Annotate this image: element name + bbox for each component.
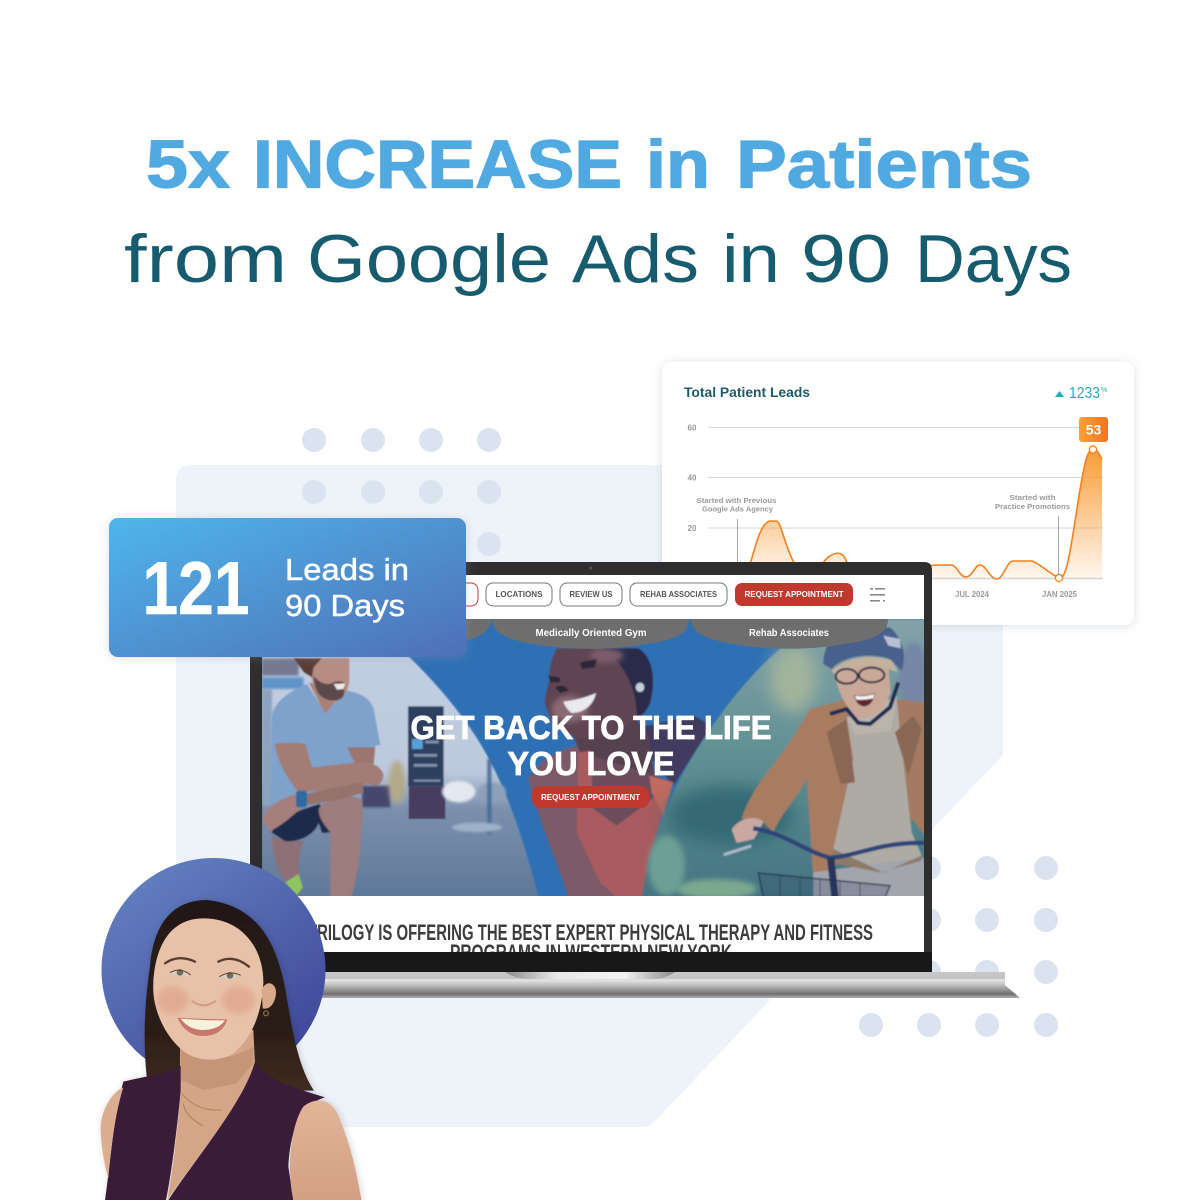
chart gridlines and axis labels bbox=[688, 424, 1103, 599]
website section heading bbox=[316, 924, 872, 952]
value badge: 53 bbox=[1079, 417, 1108, 442]
tab: rehab associates: Rehab Associates bbox=[749, 628, 829, 639]
chart gridlines and axis labels: 40 bbox=[688, 474, 697, 482]
hero headline: GET BACK TO THE LIFE bbox=[410, 709, 772, 746]
callout number: 121 bbox=[142, 546, 250, 630]
subtitle: from Google Ads in 90 Days bbox=[124, 221, 1072, 297]
nose shadow bbox=[192, 1001, 216, 1005]
growth figure: 1233% bbox=[1055, 385, 1107, 402]
top: right panel bbox=[168, 1062, 325, 1200]
nav button: partially hidden pill bbox=[466, 582, 478, 606]
nav button: request appointment: REQUEST APPOINTMENT bbox=[744, 589, 844, 599]
chart gridlines and axis labels: JUL 2024 bbox=[955, 590, 990, 599]
laptop base bbox=[300, 972, 1020, 998]
nav button: locations: LOCATIONS bbox=[496, 589, 543, 599]
title: 5x increase in patients: in bbox=[646, 126, 710, 202]
callout label: Leads in bbox=[285, 552, 409, 587]
title: 5x increase in patients: Patients bbox=[736, 126, 1032, 202]
nav button: locations bbox=[486, 583, 552, 606]
nav button: rehab associates bbox=[630, 583, 727, 606]
nav button: review us bbox=[560, 583, 622, 606]
icon: hamburger menu bbox=[870, 588, 885, 602]
chart gridlines and axis labels: JAN 2025 bbox=[1042, 590, 1078, 599]
arm: right bbox=[290, 1101, 362, 1200]
subtitle: from Google Ads in 90 Days: Days bbox=[915, 221, 1072, 297]
value badge: 53: 53 bbox=[1086, 422, 1101, 438]
annotation: started with previous agency: Google Ads Agency bbox=[702, 504, 774, 514]
laptop hinge notch bbox=[505, 972, 675, 979]
title: 5x increase in patients bbox=[146, 126, 1032, 202]
tab: rehab associates bbox=[691, 619, 888, 649]
arm: left bbox=[101, 1087, 123, 1178]
panel: total patient leads chart card bbox=[662, 362, 1134, 625]
screen: website bbox=[262, 575, 930, 965]
hero photo: smiling woman bbox=[528, 648, 712, 897]
eyes bbox=[170, 969, 241, 979]
hero button: request appointment bbox=[532, 786, 649, 808]
title: 5x increase in patients: INCREASE bbox=[253, 126, 622, 202]
portrait: smiling woman bbox=[101, 900, 362, 1200]
callout label: 90 Days bbox=[285, 588, 405, 623]
nav button: rehab associates: REHAB ASSOCIATES bbox=[640, 589, 717, 599]
top: left panel bbox=[105, 1066, 181, 1200]
face bbox=[153, 918, 263, 1060]
neck and chest bbox=[167, 1030, 255, 1200]
lower bezel bbox=[250, 952, 932, 972]
hero headline: YOU LOVE bbox=[508, 745, 674, 782]
laptop camera bbox=[590, 566, 592, 570]
subtitle: from Google Ads in 90 Days: 90 bbox=[801, 221, 891, 297]
neck shadow bbox=[181, 1047, 253, 1090]
hero image bbox=[262, 619, 930, 899]
tab: medically oriented gym bbox=[492, 619, 689, 649]
subtitle: from Google Ads in 90 Days: Google bbox=[307, 221, 551, 297]
dot grid: bottom right bbox=[859, 856, 1058, 1037]
chart heading: Total Patient Leads bbox=[684, 385, 810, 400]
annotation: started with practice promotions: Practice Promotions bbox=[995, 502, 1070, 511]
eyebrows bbox=[165, 958, 249, 967]
website section heading: TRILOGY IS OFFERING THE BEST EXPERT PHYSICAL THERAPY AND FITNESS bbox=[308, 920, 873, 945]
ear and earring bbox=[262, 983, 276, 1016]
nav button: request appointment bbox=[735, 583, 853, 606]
annotation: started with practice promotions: Started with bbox=[1010, 493, 1056, 502]
hair bbox=[145, 900, 314, 1091]
hero button: request appointment: REQUEST APPOINTMENT bbox=[541, 792, 641, 802]
background panel with chamfered corner bbox=[176, 465, 1003, 1127]
laptop bbox=[250, 562, 1020, 998]
annotation: started with practice promotions bbox=[995, 493, 1070, 578]
hero headline bbox=[411, 715, 771, 776]
annotation: started with previous agency: Started with Previous bbox=[696, 496, 776, 505]
tab: left hidden bbox=[466, 619, 491, 640]
growth figure: 1233%: 1233 bbox=[1069, 385, 1100, 402]
subtitle: from Google Ads in 90 Days: in bbox=[722, 221, 780, 297]
dot grid: top bbox=[302, 428, 501, 556]
chart gridlines and axis labels: 60 bbox=[688, 424, 697, 432]
title: 5x increase in patients: 5x bbox=[146, 126, 230, 202]
area line chart bbox=[738, 446, 1102, 582]
tab: medically oriented gym: Medically Oriented Gym bbox=[536, 628, 647, 639]
callout label bbox=[285, 552, 409, 623]
laptop bezel bbox=[250, 562, 932, 972]
hero photo: man stretching bbox=[262, 657, 539, 896]
portrait background circle bbox=[102, 858, 326, 1082]
website section heading: PROGRAMS IN WESTERN NEW YORK bbox=[450, 940, 732, 965]
growth figure: 1233%: % bbox=[1101, 387, 1107, 394]
necklace bbox=[182, 1093, 222, 1126]
callout: 121 leads in 90 days bbox=[109, 518, 466, 657]
smile bbox=[177, 1018, 227, 1036]
annotation: started with previous agency bbox=[696, 496, 776, 578]
subtitle: from Google Ads in 90 Days: from bbox=[124, 221, 287, 297]
cheek blush bbox=[157, 986, 255, 1014]
hero photo: woman on bicycle bbox=[642, 619, 930, 899]
subtitle: from Google Ads in 90 Days: Ads bbox=[572, 221, 699, 297]
chart gridlines and axis labels: 20 bbox=[688, 524, 697, 533]
nav button: review us: REVIEW US bbox=[570, 589, 613, 599]
